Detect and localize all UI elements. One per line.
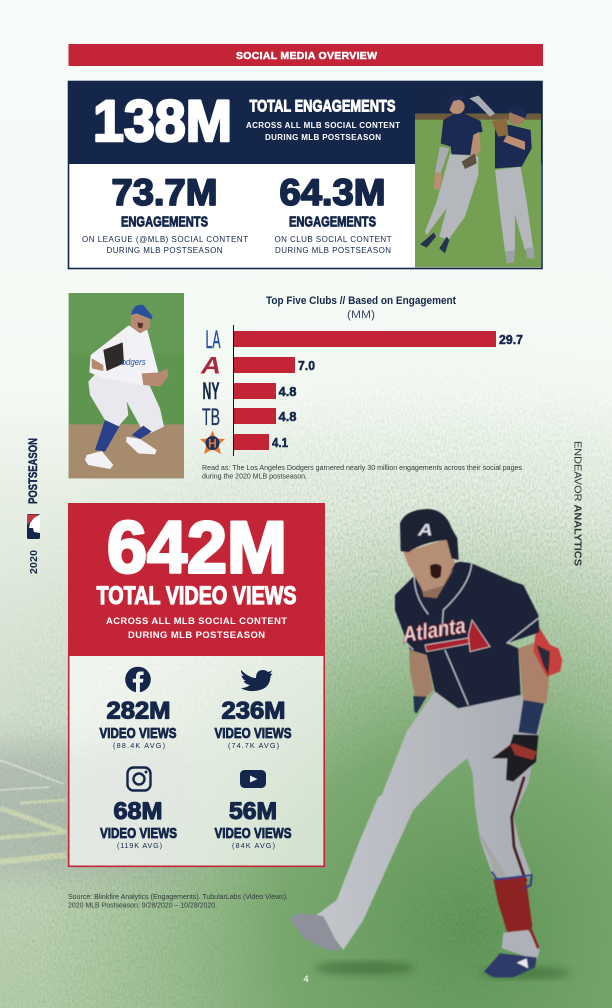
- bar: Dodgers 29.7: [234, 331, 523, 347]
- stat: Facebook video views: [100, 667, 177, 750]
- chart note: Read as: The Los Angeles Dodgers garnered nearly 30 million engagements across their social pages: [202, 463, 522, 472]
- big number: 138M: 138M: [93, 89, 232, 154]
- stat: YouTube video views: [214, 770, 292, 850]
- source note: Source: Blinkfire Analytics (Engagements). TubularLabs (Video Views).: [68, 892, 288, 901]
- total engagements label: TOTAL ENGAGEMENTS: [250, 96, 396, 116]
- helmet logo: A: [417, 521, 433, 540]
- bar: Rays 4.8: [234, 408, 297, 424]
- chart: top five clubs by engagement: LA: [206, 326, 221, 354]
- icon: Braves logo: A: [200, 352, 221, 380]
- photo: two Rays players leaping: [415, 81, 542, 267]
- total video views label: [96, 582, 296, 640]
- total video views label: TOTAL VIDEO VIEWS: [96, 582, 296, 610]
- stat: Instagram video views: 68M: [114, 798, 162, 825]
- player jersey: [395, 562, 539, 708]
- bar: Braves 7.0: [234, 357, 315, 373]
- photo: Braves player shouting: [289, 509, 570, 979]
- page number: 4: [303, 974, 309, 984]
- side label: Endeavor Analytics: ENDEAVOR ANALYTICS: [572, 441, 584, 566]
- total engagements label: ACROSS ALL MLB SOCIAL CONTENT: [246, 121, 400, 130]
- stat: YouTube video views: VIDEO VIEWS: [214, 826, 292, 842]
- chart title: (MM): [347, 309, 375, 321]
- stat: Facebook video views: VIDEO VIEWS: [100, 726, 177, 742]
- bar: Braves 7.0: 7.0: [298, 359, 315, 373]
- chart title: [266, 295, 456, 321]
- stat: Twitter video views: (74.7K AVG): [228, 741, 279, 750]
- stat: club engagements: [274, 172, 392, 255]
- stat: Instagram video views: VIDEO VIEWS: [100, 826, 177, 842]
- icon: Facebook: [125, 667, 151, 692]
- stat: Instagram video views: [100, 768, 177, 850]
- side label: 2020 MLB postseason: [27, 438, 40, 574]
- stat: Instagram video views: (119K AVG): [117, 841, 162, 850]
- photo: Dodgers pitcher celebrating: [69, 293, 184, 478]
- icon: Twitter: [241, 670, 272, 691]
- icon: YouTube: [240, 770, 266, 788]
- stat: league engagements: DURING MLB POSTSEASON: [106, 246, 223, 255]
- total engagements label: DURING MLB POSTSEASON: [265, 133, 381, 142]
- player head and helmet: [400, 509, 459, 598]
- stat: Twitter video views: [214, 670, 292, 750]
- player shadows: [315, 961, 570, 979]
- player arms and gloves: [409, 623, 562, 782]
- chart: top five clubs by engagement: [200, 295, 523, 480]
- stat: club engagements: ON CLUB SOCIAL CONTENT: [274, 235, 392, 244]
- stat: league engagements: [82, 172, 248, 255]
- bar: Dodgers 29.7: 29.7: [499, 333, 523, 347]
- bar: Astros 4.1: 4.1: [272, 436, 288, 450]
- player legs and pants: [289, 692, 543, 977]
- side label: 2020 MLB postseason: POSTSEASON: [28, 438, 40, 504]
- big number: 642M: 642M: [107, 508, 287, 588]
- stat: club engagements: 64.3M: [280, 172, 386, 213]
- background: faded baseball field: [0, 364, 612, 1008]
- chart note: [202, 463, 522, 480]
- bar: Yankees 4.8: [234, 383, 297, 399]
- side label: 2020 MLB postseason: 2020: [28, 550, 40, 574]
- stat: Facebook video views: (88.4K AVG): [113, 741, 165, 750]
- icon: Astros logo: [200, 430, 225, 454]
- source note: 2020 MLB Postseason: 9/28/2020 – 10/28/2020.: [68, 900, 217, 910]
- icon: Yankees logo: NY: [202, 378, 220, 405]
- chart note: during the 2020 MLB postseason.: [202, 472, 307, 480]
- total video views label: DURING MLB POSTSEASON: [128, 629, 265, 640]
- icon: Rays logo: TB: [202, 404, 220, 431]
- stat: club engagements: ENGAGEMENTS: [289, 214, 376, 230]
- total video views label: ACROSS ALL MLB SOCIAL CONTENT: [106, 615, 287, 626]
- stat: league engagements: 73.7M: [112, 172, 218, 213]
- stat: league engagements: ENGAGEMENTS: [121, 214, 208, 230]
- stat: YouTube video views: (84K AVG): [232, 841, 275, 850]
- jersey script: Atlanta: Atlanta: [400, 613, 467, 647]
- panel: total engagements: [68, 81, 542, 269]
- stat: Twitter video views: 236M: [222, 698, 286, 724]
- stat: league engagements: ON LEAGUE (@MLB) SOCIAL CONTENT: [82, 235, 248, 244]
- icon: Instagram: [128, 768, 150, 790]
- photo: Dodgers pitcher celebrating: odgers: [122, 357, 146, 367]
- stat: Twitter video views: VIDEO VIEWS: [214, 726, 292, 742]
- bar: Yankees 4.8: 4.8: [278, 385, 297, 399]
- panel: total video views: [68, 503, 325, 866]
- stat: club engagements: DURING MLB POSTSEASON: [275, 246, 391, 255]
- stat: YouTube video views: 56M: [229, 798, 277, 825]
- stat: Facebook video views: 282M: [106, 698, 170, 724]
- chart title: Top Five Clubs // Based on Engagement: [266, 295, 456, 307]
- bar: Astros 4.1: [234, 434, 288, 450]
- heading bar: social media overview: SOCIAL MEDIA OVERVIEW: [236, 50, 377, 62]
- icon: Astros logo: H: [208, 436, 217, 450]
- source note: [68, 892, 288, 910]
- heading bar: social media overview: [68, 44, 543, 66]
- total engagements label: [246, 96, 400, 142]
- icon: MLB logo: [27, 514, 40, 539]
- bar: Rays 4.8: 4.8: [278, 410, 297, 424]
